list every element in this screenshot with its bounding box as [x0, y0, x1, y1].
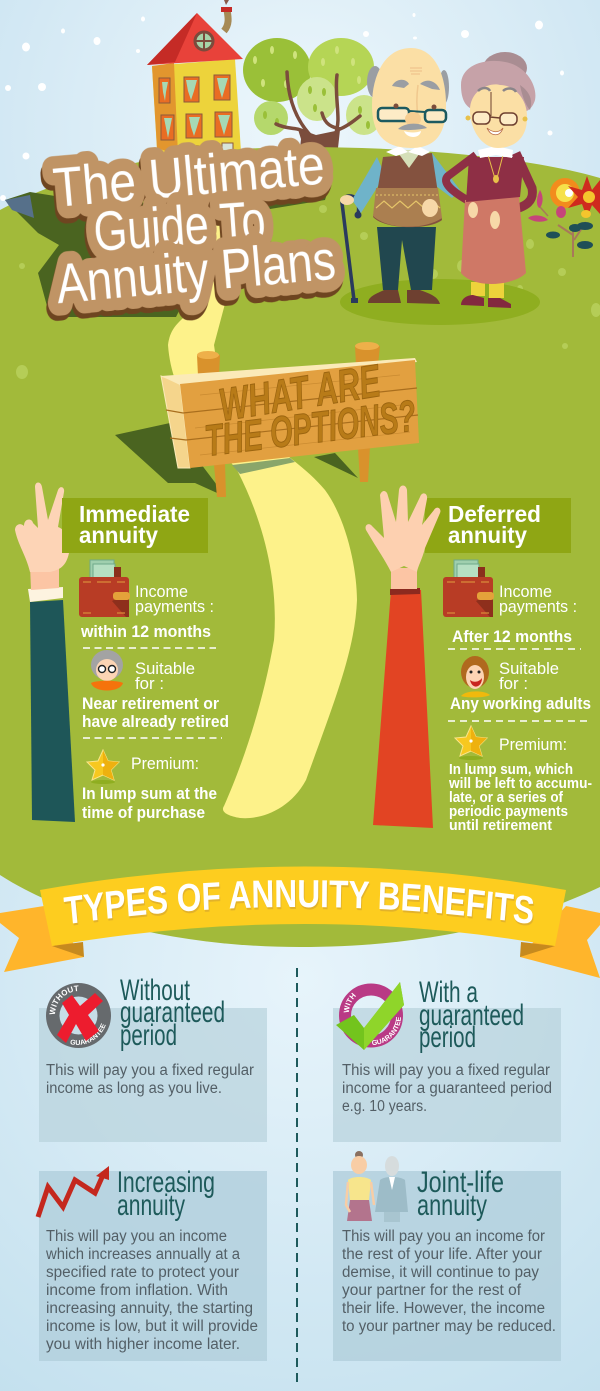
- description: to your partner may be reduced.: [342, 1318, 556, 1335]
- description: This will pay you a fixed regular: [342, 1062, 550, 1079]
- description: specified rate to protect your: [46, 1264, 239, 1281]
- heading: guaranteed: [120, 996, 225, 1029]
- title: [51, 132, 338, 315]
- panel heading: deferred annuity: annuity: [448, 522, 527, 548]
- heading: Increasing: [117, 1166, 215, 1199]
- heading: [419, 976, 524, 1054]
- heading: [120, 974, 225, 1052]
- banner: types of annuity benefits: [0, 866, 600, 978]
- flowers: [528, 176, 600, 257]
- heading: guaranteed: [419, 999, 524, 1032]
- right arm: open hand: [366, 486, 440, 828]
- heading: period: [419, 1021, 476, 1054]
- description: income from inflation. With: [46, 1282, 228, 1299]
- snow dots: [0, 13, 564, 201]
- deferred annuity: premium: [448, 726, 592, 834]
- immediate annuity: suitable for: Near retirement or: [82, 694, 219, 713]
- immediate annuity: income payments: payments :: [135, 597, 214, 616]
- panel heading: deferred annuity: Deferred: [448, 501, 541, 527]
- deferred annuity: premium: Premium:: [499, 735, 567, 754]
- deferred annuity: premium: In lump sum, which: [449, 761, 573, 778]
- tree: [243, 38, 382, 148]
- wooden sign: [115, 342, 419, 497]
- left arm: peace hand: [15, 482, 75, 822]
- immediate annuity: premium: Premium:: [131, 754, 199, 773]
- house: [147, 0, 243, 160]
- banner: types of annuity benefits: TYPES OF ANNUITY BENEFITS: [64, 880, 534, 926]
- heading: Joint-life: [417, 1166, 504, 1199]
- couple ground shadow: [340, 279, 540, 325]
- panel heading: deferred annuity: [425, 498, 571, 553]
- title: The Ultimate: [51, 132, 327, 219]
- heading: [417, 1166, 504, 1222]
- immediate annuity: suitable for: have already retired: [82, 712, 229, 731]
- panel heading: immediate annuity: [62, 498, 208, 553]
- description: demise, it will continue to pay: [342, 1264, 539, 1281]
- panel: with a guaranteed period: [333, 976, 561, 1142]
- heading: Without: [120, 974, 190, 1007]
- description: [342, 1062, 552, 1115]
- green hill: [0, 147, 600, 947]
- deferred annuity: income payments: [443, 560, 577, 646]
- icon: guarantee check badge: [336, 982, 404, 1050]
- description: the rest of your life. After your: [342, 1246, 542, 1263]
- title: Annuity Plans: [54, 228, 338, 315]
- icon: guarantee check badge: GUARANTEE: [372, 1017, 401, 1045]
- deferred annuity: premium: periodic payments: [449, 803, 568, 820]
- description: [342, 1228, 556, 1335]
- hill dots: [16, 205, 600, 379]
- description: you with higher income later.: [46, 1336, 240, 1353]
- panel: without guaranteed period: [39, 974, 267, 1142]
- description: This will pay you a fixed regular: [46, 1062, 254, 1079]
- deferred annuity: premium: late, or a series of: [449, 789, 564, 806]
- title shadow on hill: [5, 187, 329, 317]
- heading: annuity: [117, 1189, 185, 1222]
- immediate annuity: premium: [82, 750, 217, 822]
- heading: [117, 1166, 215, 1222]
- immediate annuity: suitable for: [82, 650, 229, 731]
- deferred annuity: premium: until retirement: [449, 817, 552, 834]
- wooden sign: THE OPTIONS?: [202, 391, 419, 466]
- panel: increasing annuity: [38, 1166, 267, 1361]
- description: [45, 1228, 258, 1353]
- immediate annuity: suitable for: for :: [135, 674, 164, 693]
- immediate annuity: suitable for: Suitable: [135, 659, 195, 678]
- immediate annuity: premium: time of purchase: [82, 803, 205, 822]
- panel heading: immediate annuity: Immediate: [79, 501, 190, 527]
- description: This will pay you an income: [46, 1228, 227, 1245]
- heading: period: [120, 1019, 177, 1052]
- description: their life. However, the income: [342, 1300, 545, 1317]
- icon: without guarantee badge: [46, 983, 111, 1048]
- wooden sign: WHAT ARE: [215, 354, 384, 431]
- deferred annuity: suitable for: Suitable: [499, 659, 559, 678]
- old man: [340, 48, 460, 304]
- immediate annuity: income payments: within 12 months: [80, 622, 211, 641]
- heading: With a: [419, 976, 478, 1009]
- road: [168, 205, 357, 818]
- deferred annuity: income payments: payments :: [499, 597, 577, 616]
- immediate annuity: income payments: [79, 560, 214, 641]
- immediate annuity: premium: In lump sum at the: [82, 784, 217, 803]
- icon: guarantee check badge: WITH: [344, 992, 356, 1012]
- heading: annuity: [417, 1189, 487, 1222]
- description: income for a guaranteed period: [342, 1080, 552, 1097]
- description: [46, 1062, 254, 1097]
- description: income is low, but it will provide: [46, 1318, 258, 1335]
- description: This will pay you an income for: [342, 1228, 545, 1245]
- title: Guide To: [91, 188, 267, 263]
- deferred annuity: suitable for: for :: [499, 674, 528, 693]
- description: increasing annuity, the starting: [46, 1300, 253, 1317]
- panel: joint-life annuity: [333, 1151, 561, 1361]
- icon: rising arrow: [38, 1166, 109, 1217]
- deferred annuity: income payments: Income: [499, 582, 552, 601]
- icon: without guarantee badge: GUARANTEE: [70, 1023, 106, 1045]
- immediate annuity: income payments: Income: [135, 582, 188, 601]
- center divider: [296, 968, 298, 1382]
- icon: couple: [346, 1151, 408, 1222]
- old woman: [446, 52, 535, 308]
- deferred annuity: suitable for: [450, 656, 591, 713]
- description: e.g. 10 years.: [342, 1098, 427, 1115]
- description: your partner for the rest of: [342, 1282, 522, 1299]
- description: which increases annually at a: [45, 1246, 240, 1263]
- deferred annuity: income payments: After 12 months: [452, 627, 572, 646]
- description: income as long as you live.: [46, 1080, 222, 1097]
- icon: without guarantee badge: WITHOUT: [49, 985, 78, 1014]
- panel heading: immediate annuity: annuity: [79, 522, 158, 548]
